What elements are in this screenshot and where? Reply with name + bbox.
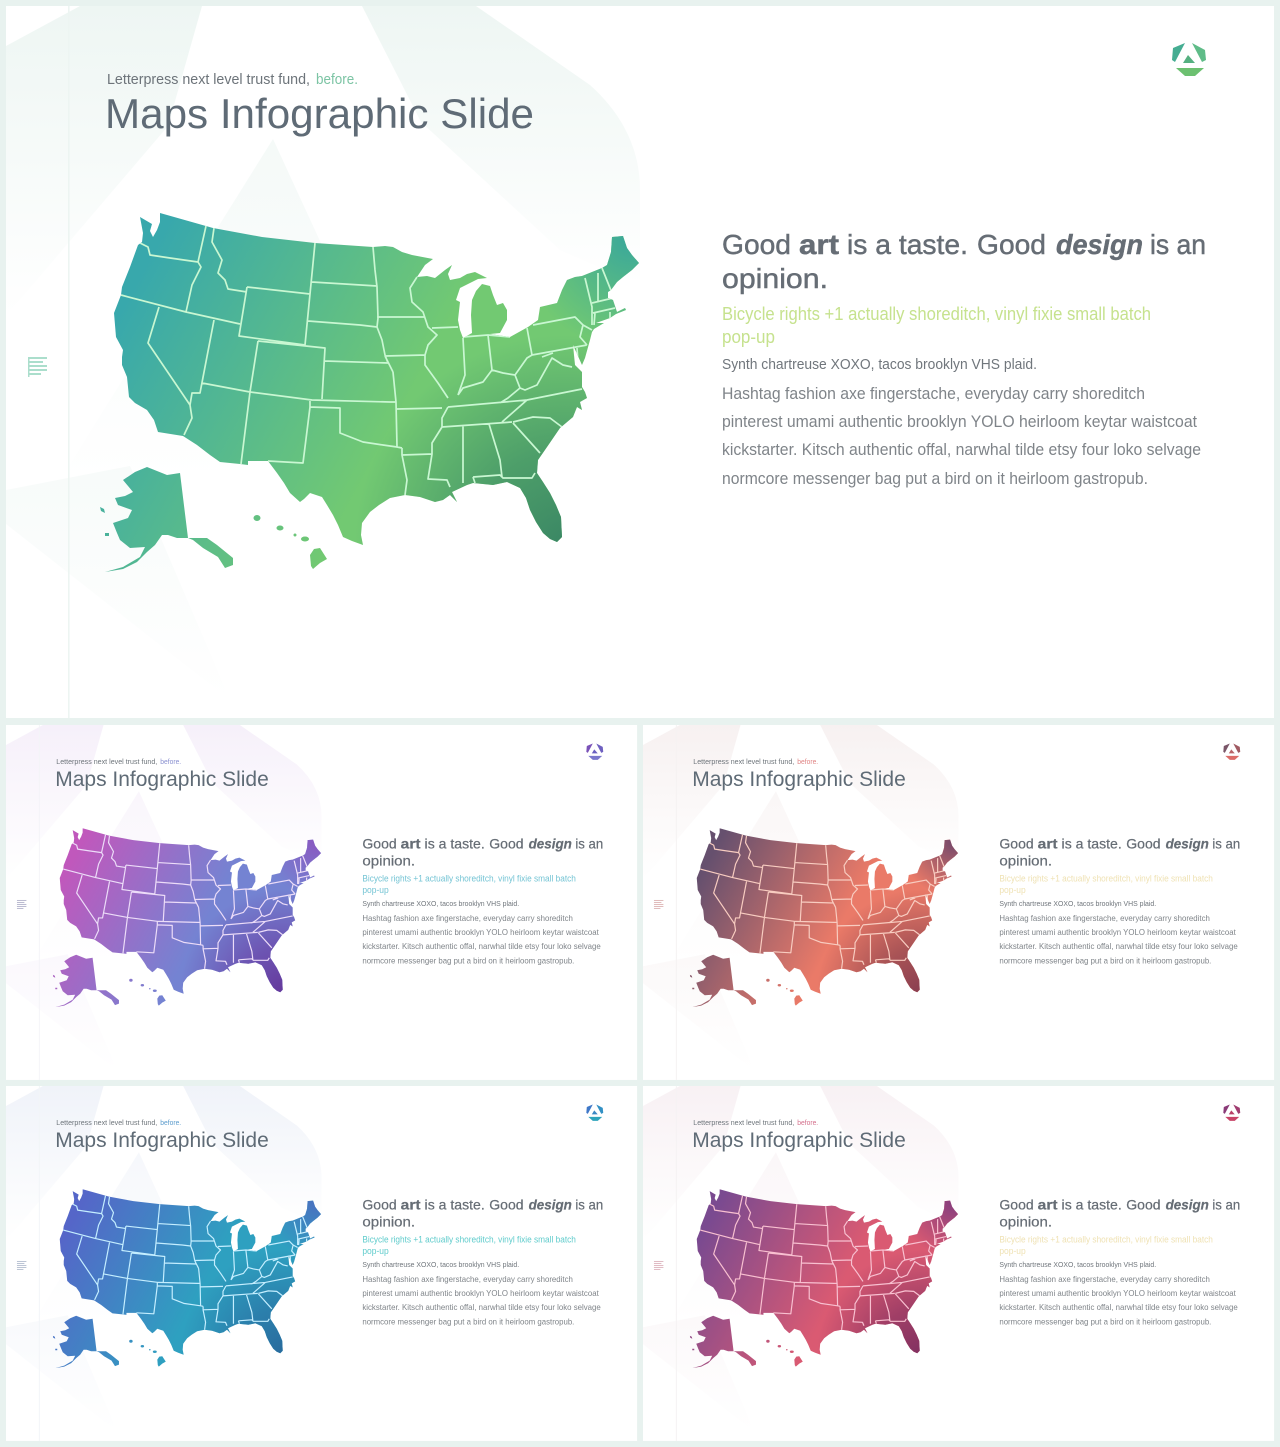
heading: opinion.: [999, 1214, 1052, 1230]
body text: normcore messenger bag put a bird on it heirloom gastropub.: [999, 1317, 1211, 1326]
subheading: Bicycle rights +1 actually shoreditch, vinyl fixie small batch: [999, 874, 1213, 884]
title: Maps Infographic Slide: [105, 90, 534, 137]
heading: is a taste.: [1062, 1197, 1122, 1213]
eyebrow text: before.: [797, 1118, 818, 1127]
subheading: [362, 1235, 576, 1256]
heading: Good: [999, 1197, 1034, 1213]
subheading: [722, 304, 1151, 347]
subheading: Bicycle rights +1 actually shoreditch, vinyl fixie small batch: [362, 874, 576, 884]
heading: opinion.: [362, 1214, 415, 1230]
body text: [362, 914, 601, 965]
subheading: pop-up: [362, 885, 389, 895]
heading: is a taste.: [1062, 836, 1122, 852]
heading: is an: [1212, 836, 1240, 852]
eyebrow text: before.: [160, 1118, 181, 1127]
subheading: Bicycle rights +1 actually shoreditch, vinyl fixie small batch: [999, 1235, 1213, 1245]
body text: normcore messenger bag put a bird on it heirloom gastropub.: [362, 956, 574, 965]
heading: Good: [1126, 1197, 1161, 1213]
body text: Hashtag fashion axe fingerstache, everyday carry shoreditch: [362, 1275, 573, 1284]
heading: [999, 836, 1240, 869]
panel: crimson slide: [643, 1086, 1274, 1441]
body text: normcore messenger bag put a bird on it heirloom gastropub.: [722, 470, 1148, 488]
heading: Good: [722, 229, 791, 260]
subheading: Bicycle rights +1 actually shoreditch, vinyl fixie small batch: [722, 304, 1151, 324]
eyebrow text: Letterpress next level trust fund,: [56, 1118, 157, 1127]
subheading: [362, 874, 576, 895]
body text: [362, 1275, 601, 1326]
body text: Hashtag fashion axe fingerstache, everyday carry shoreditch: [722, 385, 1145, 403]
heading: art: [401, 836, 421, 852]
heading: is a taste.: [425, 836, 485, 852]
logo: [1223, 743, 1240, 760]
heading: is an: [575, 836, 603, 852]
side icon: list lines: [654, 900, 663, 909]
heading: opinion.: [722, 263, 828, 294]
body text: pinterest umami authentic brooklyn YOLO heirloom keytar waistcoat: [362, 928, 599, 937]
eyebrow text: Letterpress next level trust fund,: [693, 1118, 794, 1127]
heading: Good: [362, 1197, 397, 1213]
eyebrow text: Letterpress next level trust fund,: [693, 757, 794, 766]
map: United States: [90, 200, 650, 580]
caption: Synth chartreuse XOXO, tacos brooklyn VHS plaid.: [362, 1260, 519, 1269]
heading: is an: [1212, 1197, 1240, 1213]
heading: is an: [1150, 229, 1206, 260]
heading: Good: [999, 836, 1034, 852]
map: United States: [685, 1183, 964, 1372]
body text: [999, 914, 1238, 965]
heading: Good: [977, 229, 1046, 260]
logo: [1172, 43, 1206, 76]
side icon: list lines: [28, 357, 47, 377]
heading: is a taste.: [847, 229, 968, 260]
body text: normcore messenger bag put a bird on it heirloom gastropub.: [362, 1317, 574, 1326]
eyebrow text: Letterpress next level trust fund,: [56, 757, 157, 766]
body text: pinterest umami authentic brooklyn YOLO heirloom keytar waistcoat: [722, 413, 1197, 431]
eyebrow text: before.: [160, 757, 181, 766]
heading: art: [401, 1197, 421, 1213]
heading: Good: [489, 1197, 524, 1213]
heading: [999, 1197, 1240, 1230]
heading: Good: [362, 836, 397, 852]
panel: coral slide: [643, 725, 1274, 1080]
side icon: list lines: [17, 1261, 26, 1270]
heading: opinion.: [362, 853, 415, 869]
subheading: pop-up: [362, 1246, 389, 1256]
subheading: pop-up: [999, 1246, 1026, 1256]
caption: Synth chartreuse XOXO, tacos brooklyn VHS plaid.: [362, 899, 519, 908]
side icon: list lines: [17, 900, 26, 909]
body text: kickstarter. Kitsch authentic offal, narwhal tilde etsy four loko selvage: [722, 441, 1201, 459]
title: Maps Infographic Slide: [692, 1129, 906, 1152]
heading: design: [529, 1197, 572, 1213]
title: Maps Infographic Slide: [55, 768, 269, 791]
map: United States: [48, 1183, 327, 1372]
body text: pinterest umami authentic brooklyn YOLO heirloom keytar waistcoat: [999, 1289, 1236, 1298]
heading: design: [1166, 836, 1209, 852]
heading: art: [799, 229, 839, 260]
subheading: pop-up: [722, 327, 775, 347]
body text: Hashtag fashion axe fingerstache, everyday carry shoreditch: [999, 914, 1210, 923]
heading: design: [529, 836, 572, 852]
side icon: list lines: [654, 1261, 663, 1270]
heading: [362, 836, 603, 869]
subheading: [999, 874, 1213, 895]
subheading: pop-up: [999, 885, 1026, 895]
body text: pinterest umami authentic brooklyn YOLO heirloom keytar waistcoat: [999, 928, 1236, 937]
logo: [586, 1104, 603, 1121]
body text: kickstarter. Kitsch authentic offal, narwhal tilde etsy four loko selvage: [362, 942, 601, 951]
panel: purple slide: [6, 725, 637, 1080]
body text: kickstarter. Kitsch authentic offal, narwhal tilde etsy four loko selvage: [999, 942, 1238, 951]
body text: kickstarter. Kitsch authentic offal, narwhal tilde etsy four loko selvage: [999, 1303, 1238, 1312]
eyebrow text: Letterpress next level trust fund,: [107, 72, 310, 88]
caption: Synth chartreuse XOXO, tacos brooklyn VHS plaid.: [999, 1260, 1156, 1269]
body text: Hashtag fashion axe fingerstache, everyday carry shoreditch: [999, 1275, 1210, 1284]
body text: pinterest umami authentic brooklyn YOLO heirloom keytar waistcoat: [362, 1289, 599, 1298]
heading: Good: [489, 836, 524, 852]
heading: art: [1038, 1197, 1058, 1213]
eyebrow text: before.: [797, 757, 818, 766]
heading: Good: [1126, 836, 1161, 852]
caption: Synth chartreuse XOXO, tacos brooklyn VHS plaid.: [722, 357, 1037, 373]
panel: blue slide: [6, 1086, 637, 1441]
map: United States: [48, 822, 327, 1011]
eyebrow text: before.: [316, 72, 358, 88]
subheading: Bicycle rights +1 actually shoreditch, vinyl fixie small batch: [362, 1235, 576, 1245]
heading: art: [1038, 836, 1058, 852]
title: Maps Infographic Slide: [692, 768, 906, 791]
logo: [586, 743, 603, 760]
body text: normcore messenger bag put a bird on it heirloom gastropub.: [999, 956, 1211, 965]
heading: [362, 1197, 603, 1230]
body text: [999, 1275, 1238, 1326]
body text: [722, 385, 1201, 488]
body text: Hashtag fashion axe fingerstache, everyday carry shoreditch: [362, 914, 573, 923]
heading: design: [1166, 1197, 1209, 1213]
heading: is an: [575, 1197, 603, 1213]
heading: is a taste.: [425, 1197, 485, 1213]
subheading: [999, 1235, 1213, 1256]
panel: large green slide: [6, 6, 1274, 718]
caption: Synth chartreuse XOXO, tacos brooklyn VHS plaid.: [999, 899, 1156, 908]
title: Maps Infographic Slide: [55, 1129, 269, 1152]
logo: [1223, 1104, 1240, 1121]
map: United States: [685, 822, 964, 1011]
heading: opinion.: [999, 853, 1052, 869]
heading: design: [1056, 229, 1143, 260]
body text: kickstarter. Kitsch authentic offal, narwhal tilde etsy four loko selvage: [362, 1303, 601, 1312]
heading: [722, 229, 1206, 294]
